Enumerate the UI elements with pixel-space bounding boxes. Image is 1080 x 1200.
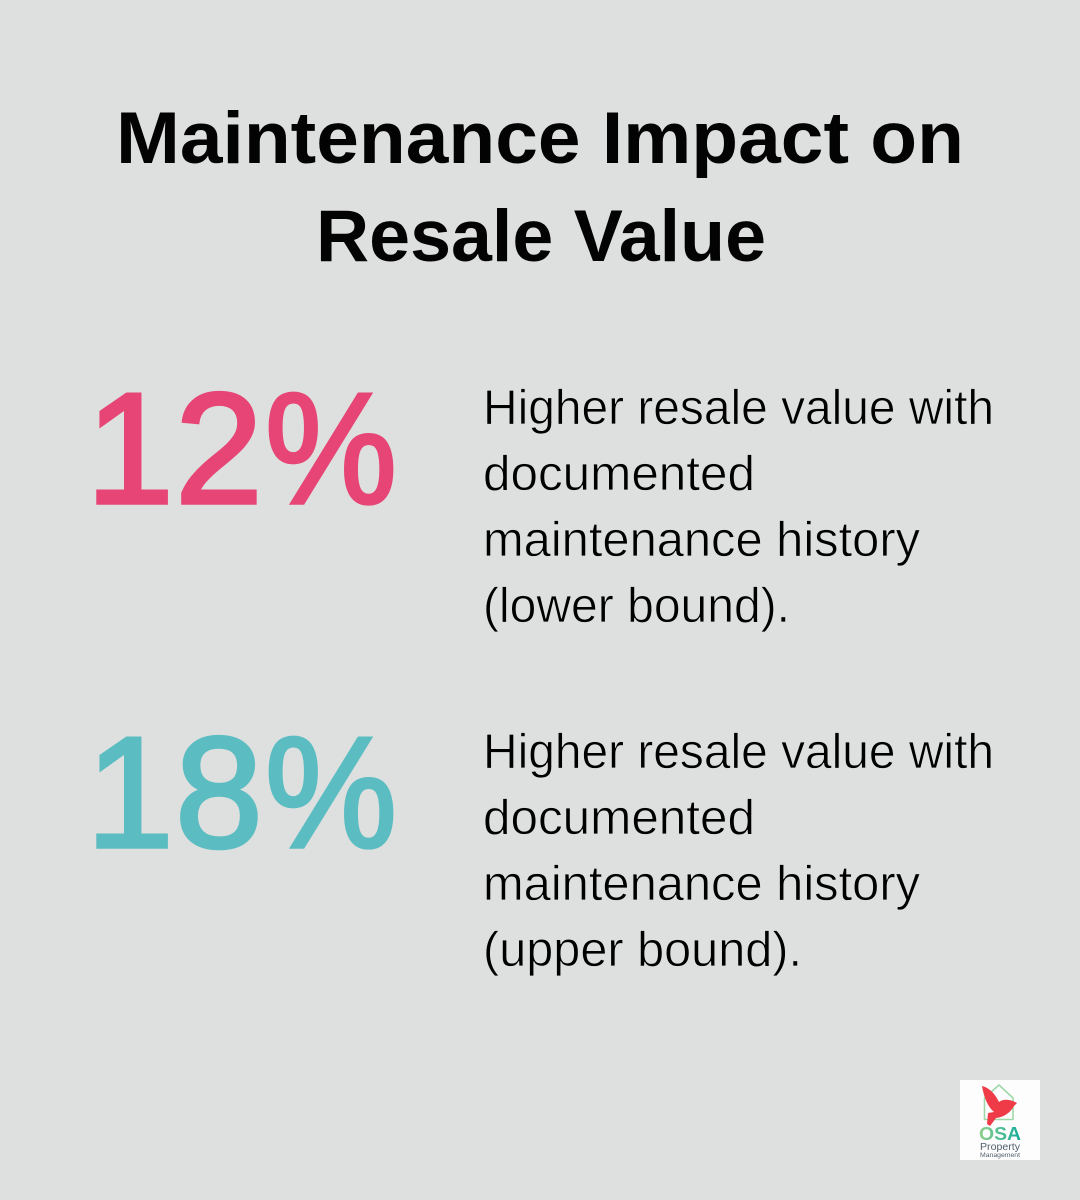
title: Maintenance Impact on <box>116 98 964 179</box>
logo subtitle: Management: Management <box>980 1153 1020 1159</box>
number: 18%: % <box>265 705 397 881</box>
description: lower bound: documented <box>483 447 755 501</box>
logo wordmark: OSA <box>979 1124 1021 1144</box>
description: upper bound: maintenance history <box>483 857 920 911</box>
description: lower bound <box>483 381 994 633</box>
number: 12%: 12 <box>86 361 263 537</box>
title: Resale Value <box>316 196 766 277</box>
number: 18% <box>86 705 397 881</box>
description: upper bound <box>483 725 994 977</box>
stat: 18% <box>86 705 994 977</box>
number: 12%: % <box>265 361 397 537</box>
icon: house outline <box>984 1085 1013 1120</box>
stat: 12% <box>86 361 994 633</box>
description: upper bound: (upper bound). <box>483 923 802 977</box>
logo subtitle: Property: Property <box>980 1142 1020 1153</box>
description: lower bound: Higher resale value with <box>483 381 994 435</box>
title <box>116 98 964 277</box>
number: 12% <box>86 361 397 537</box>
logo: OSA Property Management <box>960 1080 1040 1160</box>
number: 18%: 18 <box>86 705 263 881</box>
description: lower bound: maintenance history <box>483 513 920 567</box>
description: lower bound: (lower bound). <box>483 579 790 633</box>
description: upper bound: Higher resale value with <box>483 725 994 779</box>
description: upper bound: documented <box>483 791 755 845</box>
icon: red bird <box>982 1086 1017 1126</box>
